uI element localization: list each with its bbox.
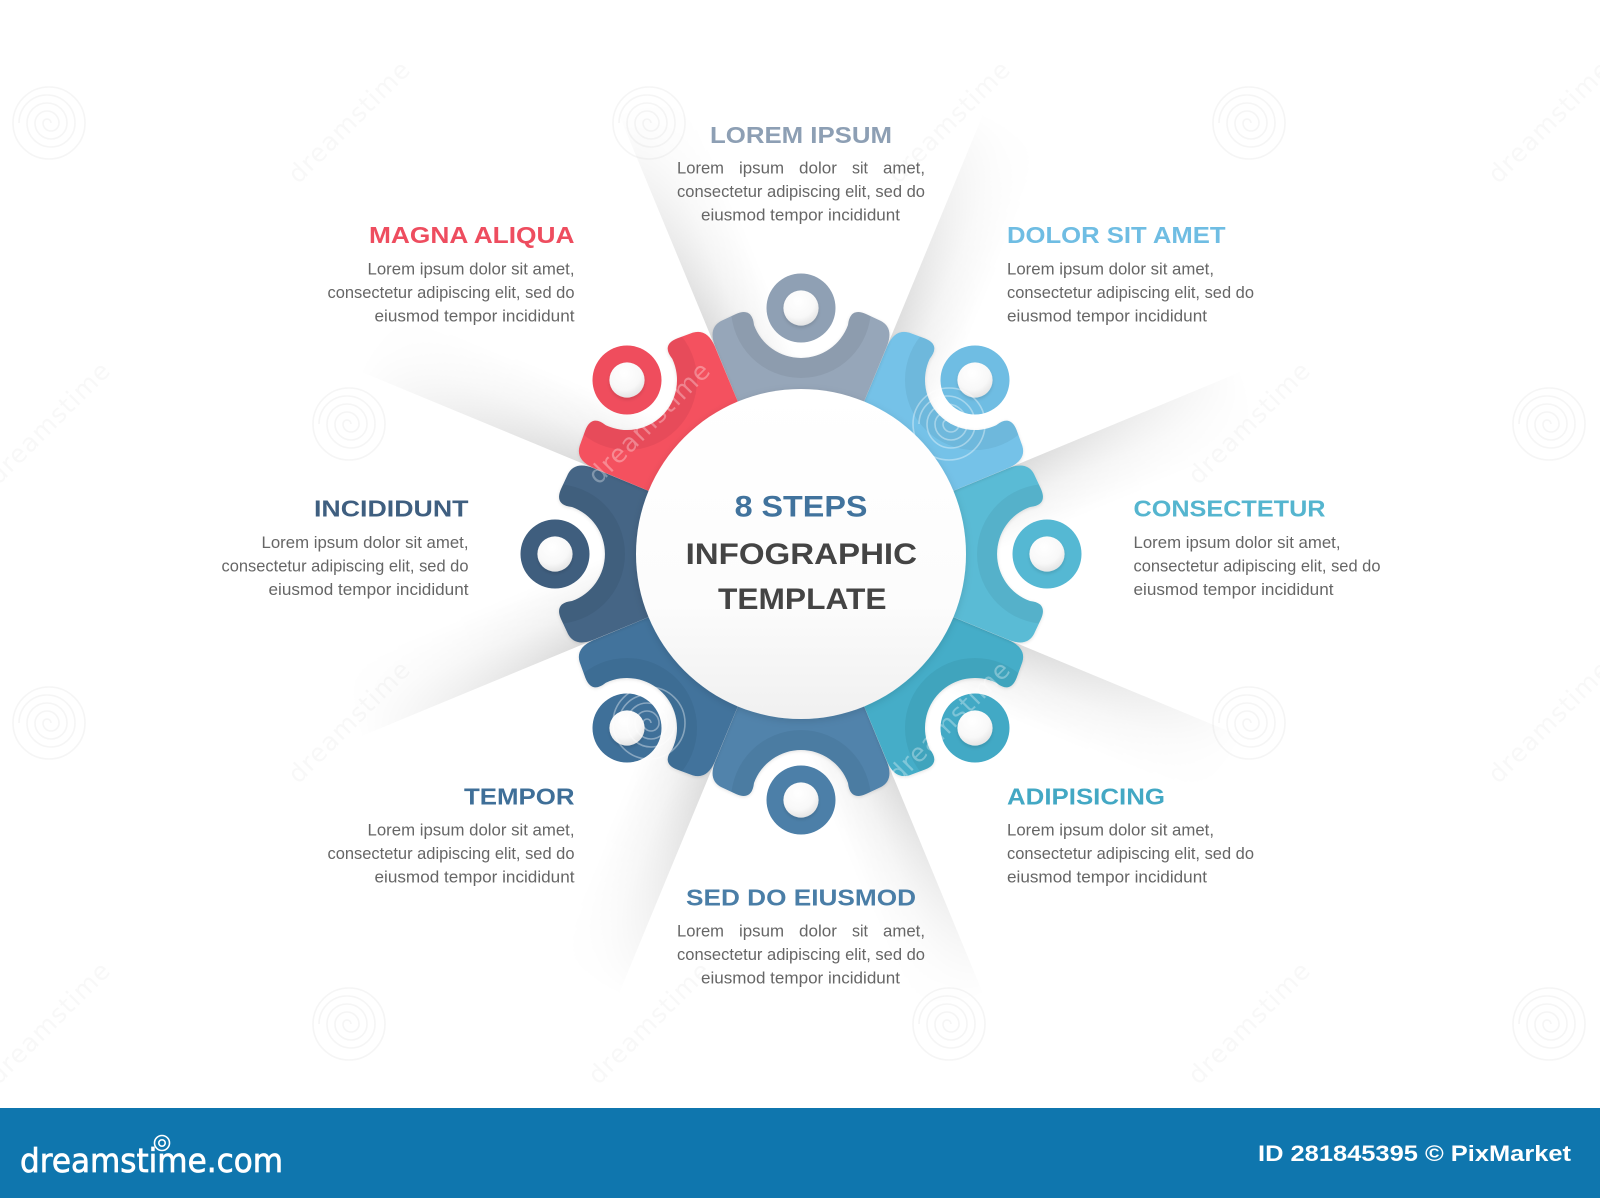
center title: TEMPLATE — [718, 583, 886, 616]
text block: dolor sit amet: DOLOR SIT AMET — [1007, 222, 1226, 248]
text block: magna aliqua: MAGNA ALIQUA — [369, 222, 574, 248]
text block: lorem ipsum: dolor — [799, 159, 838, 177]
text block: lorem ipsum: amet, — [883, 159, 925, 177]
text block: sed do eiusmod: Lorem — [677, 923, 724, 941]
text block: consectetur: CONSECTETUR — [1134, 496, 1326, 522]
background watermarks: dreamstime — [882, 55, 1016, 189]
segment: tempor — [578, 617, 738, 778]
icon: dolor sit amet ring — [940, 346, 1010, 414]
text block: consectetur — [1134, 496, 1380, 599]
text block: dolor sit amet: eiusmod tempor incididunt — [1007, 307, 1207, 325]
text block: sed do eiusmod: SED DO EIUSMOD — [686, 884, 916, 910]
background watermarks: dreamstime — [282, 655, 416, 789]
text block: dolor sit amet: Lorem ipsum dolor sit amet, — [1007, 260, 1214, 278]
icon: adipisicing ring — [940, 694, 1010, 762]
text block: incididunt: eiusmod tempor incididunt — [268, 581, 469, 599]
text block: lorem ipsum — [677, 122, 925, 224]
text block: adipisicing: ADIPISICING — [1007, 783, 1165, 809]
watermarks over chart — [582, 356, 1016, 789]
footer bar — [0, 1108, 1600, 1198]
background watermarks: dreamstime — [582, 956, 716, 1090]
icon: sed do eiusmod ring — [766, 766, 836, 834]
text block: consectetur: consectetur adipiscing elit, sed do — [1134, 557, 1380, 575]
segment: sed do eiusmod — [712, 706, 890, 798]
icon: consectetur ring — [1012, 520, 1082, 588]
text block: sed do eiusmod: dolor — [799, 923, 838, 941]
text block: lorem ipsum: ipsum — [739, 159, 784, 177]
text block: sed do eiusmod: ipsum — [739, 923, 784, 941]
text block: magna aliqua — [328, 222, 575, 325]
segment: dolor sit amet — [864, 332, 1024, 492]
background watermarks: dreamstime — [1182, 356, 1316, 490]
watermarks over chart: dreamstime — [582, 356, 716, 490]
text block: magna aliqua: eiusmod tempor incididunt — [374, 307, 575, 325]
text block: adipisicing: consectetur adipiscing elit, sed do — [1007, 845, 1254, 863]
center title: 8 STEPS — [735, 491, 867, 524]
icon: tempor ring — [592, 694, 662, 762]
text block: adipisicing: Lorem ipsum dolor sit amet, — [1007, 822, 1214, 840]
text block: incididunt — [222, 496, 469, 599]
segment: magna aliqua — [578, 332, 738, 491]
text block: sed do eiusmod: consectetur adipiscing elit, sed do — [677, 946, 925, 964]
text block: lorem ipsum: consectetur adipiscing elit, sed do — [677, 183, 925, 201]
text block: tempor: consectetur adipiscing elit, sed do — [328, 845, 574, 863]
icon: lorem ipsum ring — [766, 274, 836, 342]
background watermarks: dreamstime — [1182, 956, 1316, 1090]
segment: adipisicing — [864, 617, 1024, 778]
icon: incididunt ring — [520, 520, 590, 588]
text block: sed do eiusmod: eiusmod tempor incididunt — [701, 970, 900, 988]
footer image id: ID 281845395 © PixMarket — [1258, 1141, 1572, 1166]
text block: incididunt: Lorem ipsum dolor sit amet, — [262, 534, 468, 552]
text block: adipisicing — [1007, 783, 1254, 886]
icon: magna aliqua ring — [592, 346, 662, 414]
center title — [686, 491, 917, 616]
background watermarks: dreamstime — [282, 55, 416, 189]
center circle — [636, 389, 966, 719]
text block: magna aliqua: Lorem ipsum dolor sit amet, — [368, 260, 574, 278]
text block: lorem ipsum: sit — [852, 159, 868, 177]
text block: incididunt: consectetur adipiscing elit, sed do — [222, 557, 468, 575]
segment: incididunt — [558, 466, 648, 644]
center title: INFOGRAPHIC — [686, 538, 917, 571]
text block: lorem ipsum: eiusmod tempor incididunt — [701, 206, 900, 224]
segment: lorem ipsum — [712, 312, 890, 402]
text block: sed do eiusmod — [677, 884, 925, 988]
step segment ring — [485, 238, 1117, 870]
text block: lorem ipsum: LOREM IPSUM — [710, 122, 892, 148]
text block: dolor sit amet: consectetur adipiscing elit, sed do — [1007, 284, 1254, 302]
text block: adipisicing: eiusmod tempor incididunt — [1007, 868, 1207, 886]
text block: tempor: TEMPOR — [464, 783, 575, 809]
radial shadow rays — [327, 80, 1275, 1028]
text block: consectetur: Lorem ipsum dolor sit amet, — [1134, 534, 1340, 552]
text block: incididunt: INCIDIDUNT — [314, 496, 468, 522]
text block: magna aliqua: consectetur adipiscing elit, sed do — [328, 284, 574, 302]
footer logo: dreamstime.com — [20, 1141, 283, 1180]
segment: consectetur — [953, 466, 1044, 644]
watermarks over chart: dreamstime — [882, 655, 1016, 789]
text block: sed do eiusmod: sit — [852, 923, 868, 941]
text block: tempor — [328, 783, 575, 886]
text block: tempor: Lorem ipsum dolor sit amet, — [368, 822, 574, 840]
text block: dolor sit amet — [1007, 222, 1254, 325]
text block: lorem ipsum: Lorem — [677, 159, 724, 177]
text block: sed do eiusmod: amet, — [883, 923, 925, 941]
text block: consectetur: eiusmod tempor incididunt — [1134, 581, 1334, 599]
text block: tempor: eiusmod tempor incididunt — [374, 868, 575, 886]
